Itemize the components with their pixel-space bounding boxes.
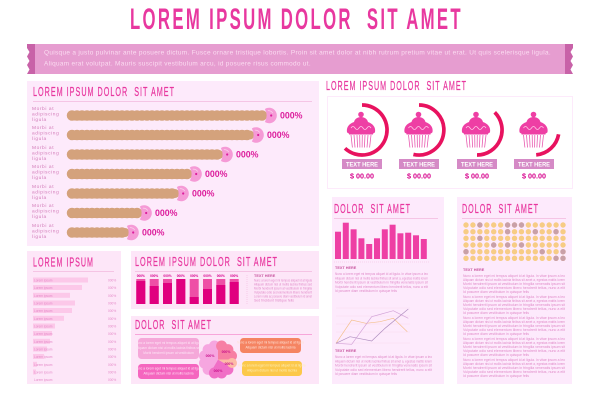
heading: dot matrix: DOLOR SIT AMET: [462, 201, 539, 216]
callout: orange: [237, 338, 304, 353]
cupcake gauge 1: TEXT HERE: [346, 162, 378, 168]
banner: Quisque a justo pulvinar ante posuere dictum. Fusce ornare tristique lobortis. Proin sit amet dolor at nibh rutrum pretium vitae ut erat. Ut quis scelerisque ligula.: [44, 50, 551, 56]
row 1: 000%: [280, 110, 303, 120]
text blocks: dot matrix: Aliquam dictum nisi ut mollis lacinia finibus sit amet a, egestas mattis lorem: [463, 299, 565, 303]
flower chart: 000%: [222, 350, 230, 354]
text blocks: dot matrix: Id posuere diam vestibulum in quisque felis: [463, 332, 529, 336]
panel: dot matrix: [457, 197, 572, 384]
panel: progress bars: [27, 81, 319, 246]
list labels: 000%: [108, 348, 116, 352]
row 2: [32, 125, 290, 143]
text blocks: dot matrix: Nunc a lorem eget mi tempus aliquet id at ligula. In vitae ipsum a leo: [463, 358, 565, 362]
stacked bars text: Nunc a lorem eget mi tempus aliquet id at ligula: [254, 278, 312, 282]
stacked bars text: Morbi hendrerit ipsum at vestibulum in fringilla: [254, 286, 312, 290]
list labels: Lorem ipsum: [34, 302, 53, 306]
cupcake gauge 2: $ 00.00: [407, 174, 431, 180]
text blocks: dot matrix: [463, 268, 565, 378]
text blocks: dot matrix: Aliquam dictum nisi ut mollis lacinia finibus sit amet a, egestas mattis lorem: [463, 320, 565, 324]
text blocks: dot matrix: Id posuere diam vestibulum in quisque felis: [463, 374, 529, 378]
line chart: [336, 308, 410, 344]
row 2: 000%: [267, 130, 290, 140]
heading: progress bars: LOREM IPSUM DOLOR SIT AMET: [33, 84, 175, 99]
flower chart: [199, 340, 237, 378]
text blocks: dot matrix: Vulputate odio sed elementum libero hendrerit tellus, nunc a elit: [463, 370, 565, 374]
callout: hot pink: Aliquam dictum nisi ut mollis lacinia: [144, 372, 194, 376]
list labels: Lorem ipsum: [34, 355, 53, 359]
text blocks: dot matrix: Vulputate odio sed elementum libero hendrerit tellus, nunc a elit: [463, 286, 565, 290]
heading: cupcakes: LOREM IPSUM DOLOR SIT AMET: [326, 78, 467, 93]
stacked bars text: Lorem nulla ac posuere diam vestibulum id amet: [254, 294, 312, 298]
list labels: Lorem ipsum: [34, 324, 53, 328]
row 6: [32, 203, 178, 221]
list labels: 000%: [108, 309, 116, 313]
text block: line chart: [335, 349, 432, 376]
row 7: 000%: [142, 228, 165, 238]
list labels: Lorem ipsum: [34, 278, 53, 282]
heading: horizontal list: LOREM IPSUM: [33, 254, 94, 270]
list labels: 000%: [108, 294, 116, 298]
text blocks: dot matrix: Vulputate odio sed elementum libero hendrerit tellus, nunc a elit: [463, 349, 565, 353]
text blocks: dot matrix: Aliquam dictum nisi ut mollis lacinia finibus sit amet a, egestas mattis lorem: [463, 362, 565, 366]
row 1: adipiscing: [32, 112, 59, 118]
row 4: adipiscing: [32, 170, 59, 176]
text block: line chart: Morbi hendrerit ipsum at vestibulum in fringilla venenatis ipsum sit: [335, 364, 432, 368]
list labels: 000%: [108, 370, 116, 374]
banner: Aliquam erat volutpat. Mauris suscipit vestibulum arcu, id posuere risus commodo ut.: [44, 60, 311, 68]
callout: yellow: [238, 361, 306, 376]
text blocks: dot matrix: Morbi hendrerit ipsum at vestibulum in fringilla venenatis ipsum sit: [463, 345, 565, 349]
cupcake gauge 4: TEXT HERE: [518, 162, 550, 168]
row 3: ligula: [32, 156, 47, 162]
row 6: adipiscing: [32, 208, 59, 214]
cupcake gauge 1: $ 00.00: [350, 174, 374, 180]
stacked bar chart: 000%: [203, 274, 212, 278]
text blocks: dot matrix: Aliquam dictum nisi ut mollis lacinia finibus sit amet a, egestas mattis lorem: [463, 278, 565, 282]
cupcake gauge 2: TEXT HERE: [403, 162, 435, 168]
row 5: ligula: [32, 195, 47, 201]
flower chart: 000%: [214, 369, 222, 373]
text block: column chart: Aliquam dictum nisi ut mollis lacinia finibus sit amet a, egestas mattis lorem: [335, 276, 428, 280]
cupcake gauge 2: [399, 105, 444, 180]
heading: flower diagram: DOLOR SIT AMET: [135, 317, 212, 332]
row 4: Morbi at: [32, 164, 54, 170]
row 6: 000%: [155, 208, 178, 218]
text blocks: dot matrix: Morbi hendrerit ipsum at vestibulum in fringilla venenatis ipsum sit: [463, 282, 565, 286]
text blocks: dot matrix: Nunc a lorem eget mi tempus aliquet id at ligula. In vitae ipsum a leo: [463, 337, 565, 341]
panel: stacked bars: [131, 251, 319, 309]
stacked bar chart: [136, 274, 239, 304]
cupcake gauge 4: [514, 112, 559, 180]
list labels: 000%: [108, 286, 116, 290]
text blocks: dot matrix: Id posuere diam vestibulum in quisque felis: [463, 353, 529, 357]
stacked bars text: TEXT HERE: [254, 274, 276, 278]
list labels: Lorem ipsum: [34, 340, 53, 344]
list labels: Lorem ipsum: [34, 370, 53, 374]
stacked bar chart: 000%: [190, 274, 198, 278]
row 1: ligula: [32, 117, 47, 123]
cupcake gauge 3: [457, 112, 502, 180]
text block: column chart: Vulputate odio sed elementum libero hendrerit tellus, nunc a elit: [335, 285, 428, 289]
stacked bars text: Aliquam dictum nisi ut mollis lacinia finibus sed: [254, 282, 312, 286]
text block: column chart: Morbi hendrerit ipsum at vestibulum in fringilla venenatis ipsum sit: [335, 281, 428, 285]
row 2: adipiscing: [32, 130, 59, 136]
text blocks: dot matrix: Aliquam dictum nisi ut mollis lacinia finibus sit amet a, egestas mattis lorem: [463, 341, 565, 345]
list labels: Lorem ipsum: [34, 378, 53, 382]
text blocks: dot matrix: Nunc a lorem eget mi tempus aliquet id at ligula. In vitae ipsum a leo: [463, 316, 565, 320]
text block: column chart: Id posuere diam vestibulum in quisque felis: [335, 289, 397, 293]
list labels: Lorem ipsum: [34, 348, 53, 352]
row 3: 000%: [236, 150, 259, 160]
stacked bar chart: 000%: [163, 274, 172, 278]
row 4: ligula: [32, 175, 47, 181]
text blocks: dot matrix: Id posuere diam vestibulum in quisque felis: [463, 311, 529, 315]
text block: line chart: TEXT HERE: [335, 349, 357, 353]
text block: line chart: Vulputate odio sed elementum libero hendrerit tellus, nunc a elit: [335, 368, 432, 372]
text block: column chart: Nunc a lorem eget mi tempus aliquet id at ligula. In vitae ipsum a leo: [335, 272, 428, 276]
callout: light pink: Nunc a lorem eget mi tempus aliquet id at ligula: [135, 341, 202, 345]
row 6: Morbi at: [32, 203, 54, 209]
panel: column chart and line chart: [332, 197, 444, 384]
heading: stacked bars: LOREM IPSUM DOLOR SIT AMET: [135, 254, 278, 269]
callout: light pink: Aliquam dictum nisi ut mollis lacinia finibus sed: [135, 346, 202, 350]
row 1: Morbi at: [32, 106, 54, 112]
row 3: adipiscing: [32, 150, 59, 156]
flower chart: 000%: [206, 354, 214, 358]
list labels: 000%: [108, 317, 116, 321]
stacked bars text: [254, 274, 312, 302]
column chart: [335, 223, 427, 259]
text blocks: dot matrix: Morbi hendrerit ipsum at vestibulum in fringilla venenatis ipsum sit: [463, 366, 565, 370]
list labels: Lorem ipsum: [34, 363, 53, 367]
text blocks: dot matrix: Morbi hendrerit ipsum at vestibulum in fringilla venenatis ipsum sit: [463, 303, 565, 307]
stacked bar chart: 000%: [150, 274, 158, 278]
list labels: Lorem ipsum: [34, 309, 53, 313]
text block: line chart: Aliquam dictum nisi ut mollis lacinia finibus sit amet a, egestas mattis lorem: [335, 359, 432, 363]
panel: cupcakes: [328, 96, 572, 188]
row 7: ligula: [32, 234, 47, 240]
banner: [27, 44, 573, 74]
callout: orange: Aliquam dictum nisi ut mollis lacinia: [246, 346, 296, 350]
row 7: Morbi at: [32, 223, 54, 229]
list labels: [34, 278, 116, 382]
heading: column chart: DOLOR SIT AMET: [334, 201, 411, 216]
callout: orange: Nunc a lorem eget mi tempus aliquet id at ligula: [237, 340, 304, 344]
dot matrix chart: [466, 225, 564, 258]
panel: horizontal list: [27, 251, 121, 384]
callout: yellow: Aliquam dictum nisi ut mollis lacinia: [247, 368, 297, 372]
list labels: Lorem ipsum: [34, 294, 53, 298]
row 5: [32, 184, 215, 201]
text block: line chart: Nunc a lorem eget mi tempus aliquet id at ligula. In vitae ipsum a leo: [335, 355, 432, 359]
row 3: [32, 145, 259, 162]
list labels: 000%: [108, 302, 116, 306]
row 6: ligula: [32, 214, 47, 220]
callout: light pink: Morbi hendrerit ipsum at vestibulum: [143, 351, 194, 355]
text blocks: dot matrix: Vulputate odio sed elementum libero hendrerit tellus, nunc a elit: [463, 328, 565, 332]
row 7: [32, 223, 165, 240]
cupcake gauge 4: $ 00.00: [522, 174, 546, 180]
stacked bar chart: 000%: [137, 274, 145, 278]
row 5: 000%: [192, 188, 215, 198]
text block: column chart: TEXT HERE: [335, 266, 357, 270]
text blocks: dot matrix: TEXT HERE: [463, 268, 485, 272]
stacked bar chart: 000%: [230, 274, 238, 278]
callout: hot pink: [135, 364, 202, 379]
list bars: [33, 278, 88, 374]
list labels: 000%: [108, 340, 116, 344]
text block: line chart: Id posuere diam vestibulum in quisque felis: [335, 372, 397, 376]
cupcake gauge 3: $ 00.00: [465, 174, 489, 180]
text blocks: dot matrix: Vulputate odio sed elementum libero hendrerit tellus, nunc a elit: [463, 307, 565, 311]
list labels: 000%: [108, 363, 116, 367]
row 3: Morbi at: [32, 145, 54, 151]
row 1: [32, 106, 303, 123]
callout: yellow: Nunc a lorem eget mi tempus aliquet id at ligula: [238, 364, 306, 368]
stacked bar chart: 000%: [177, 274, 185, 278]
text blocks: dot matrix: Nunc a lorem eget mi tempus aliquet id at ligula. In vitae ipsum a leo: [463, 295, 565, 299]
list labels: 000%: [108, 378, 116, 382]
list labels: Lorem ipsum: [34, 332, 53, 336]
flower chart: 000%: [225, 362, 233, 366]
row 4: [32, 164, 228, 182]
row 5: adipiscing: [32, 190, 59, 196]
row 4: 000%: [205, 169, 228, 179]
row 2: ligula: [32, 136, 47, 142]
text blocks: dot matrix: Id posuere diam vestibulum in quisque felis: [463, 290, 529, 294]
callout: hot pink: Nunc a lorem eget mi tempus aliquet id at ligula: [135, 366, 202, 370]
cupcake gauge 3: TEXT HERE: [461, 162, 493, 168]
list labels: 000%: [108, 278, 116, 282]
cupcake gauge 1: [342, 105, 387, 180]
panel: flower diagram: [131, 316, 319, 384]
list labels: Lorem ipsum: [34, 286, 53, 290]
text blocks: dot matrix: Morbi hendrerit ipsum at vestibulum in fringilla venenatis ipsum sit: [463, 324, 565, 328]
list labels: 000%: [108, 332, 116, 336]
row 7: adipiscing: [32, 228, 59, 234]
text blocks: dot matrix: Nunc a lorem eget mi tempus aliquet id at ligula. In vitae ipsum a leo: [463, 274, 565, 278]
row 2: Morbi at: [32, 125, 54, 131]
list labels: 000%: [108, 355, 116, 359]
text block: column chart: [335, 266, 428, 293]
stacked bars text: Vulputate odio sed elementum libero hendrerit: [254, 290, 312, 294]
stacked bar chart: 000%: [217, 274, 225, 278]
stacked bars text: Sed tincidunt tristique felis: [254, 298, 294, 302]
callout: light pink: [135, 338, 202, 359]
list labels: 000%: [108, 324, 116, 328]
list labels: Lorem ipsum: [34, 317, 53, 321]
row 5: Morbi at: [32, 184, 54, 190]
